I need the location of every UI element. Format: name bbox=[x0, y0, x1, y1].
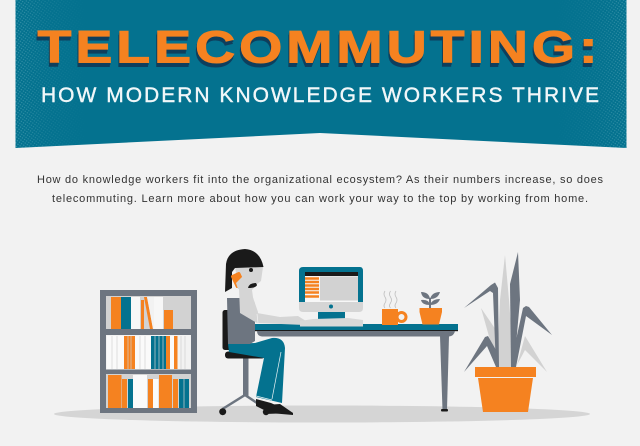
title: TELECOMMUTING: bbox=[37, 23, 597, 74]
books: top shelf bbox=[111, 297, 173, 329]
phone bbox=[231, 272, 245, 288]
intro paragraph: How do knowledge workers fit into the organizational ecosystem? As their numbers increase, so does bbox=[37, 174, 603, 186]
pot bbox=[475, 367, 536, 377]
face and neck bbox=[235, 267, 263, 305]
hair bbox=[225, 249, 264, 292]
forearm bbox=[257, 313, 306, 325]
keyboard bbox=[300, 318, 363, 326]
hand on phone bbox=[236, 275, 248, 289]
title: TELECOMMUTING: bbox=[38, 21, 597, 72]
banner bbox=[16, 0, 626, 148]
subtitle: HOW MODERN KNOWLEDGE WORKERS THRIVE bbox=[41, 84, 599, 107]
light leaves bbox=[481, 308, 498, 355]
intro paragraph bbox=[37, 174, 603, 205]
screen lines bbox=[305, 278, 319, 296]
eye bbox=[249, 268, 253, 272]
person bbox=[225, 249, 306, 415]
title: TELECOMMUTING: bbox=[36, 25, 596, 76]
floor shadow bbox=[54, 406, 590, 422]
raised arm bbox=[239, 283, 258, 323]
bookshelf bbox=[100, 290, 197, 413]
shoes bbox=[256, 399, 293, 415]
legs bbox=[228, 338, 285, 403]
books: middle shelf bbox=[107, 336, 185, 369]
desk bbox=[255, 324, 458, 412]
large potted plant bbox=[464, 252, 552, 412]
moustache bbox=[248, 283, 257, 288]
office chair bbox=[219, 310, 269, 415]
steam bbox=[384, 291, 397, 308]
dark leaves bbox=[510, 252, 520, 367]
small potted plant bbox=[420, 292, 442, 324]
intro paragraph: telecommuting. Learn more about how you can work your way to the top by working from home. bbox=[52, 193, 588, 205]
coffee mug bbox=[382, 309, 406, 325]
computer monitor bbox=[299, 267, 363, 319]
torso bbox=[227, 298, 255, 344]
books: bottom shelf bbox=[108, 375, 189, 408]
